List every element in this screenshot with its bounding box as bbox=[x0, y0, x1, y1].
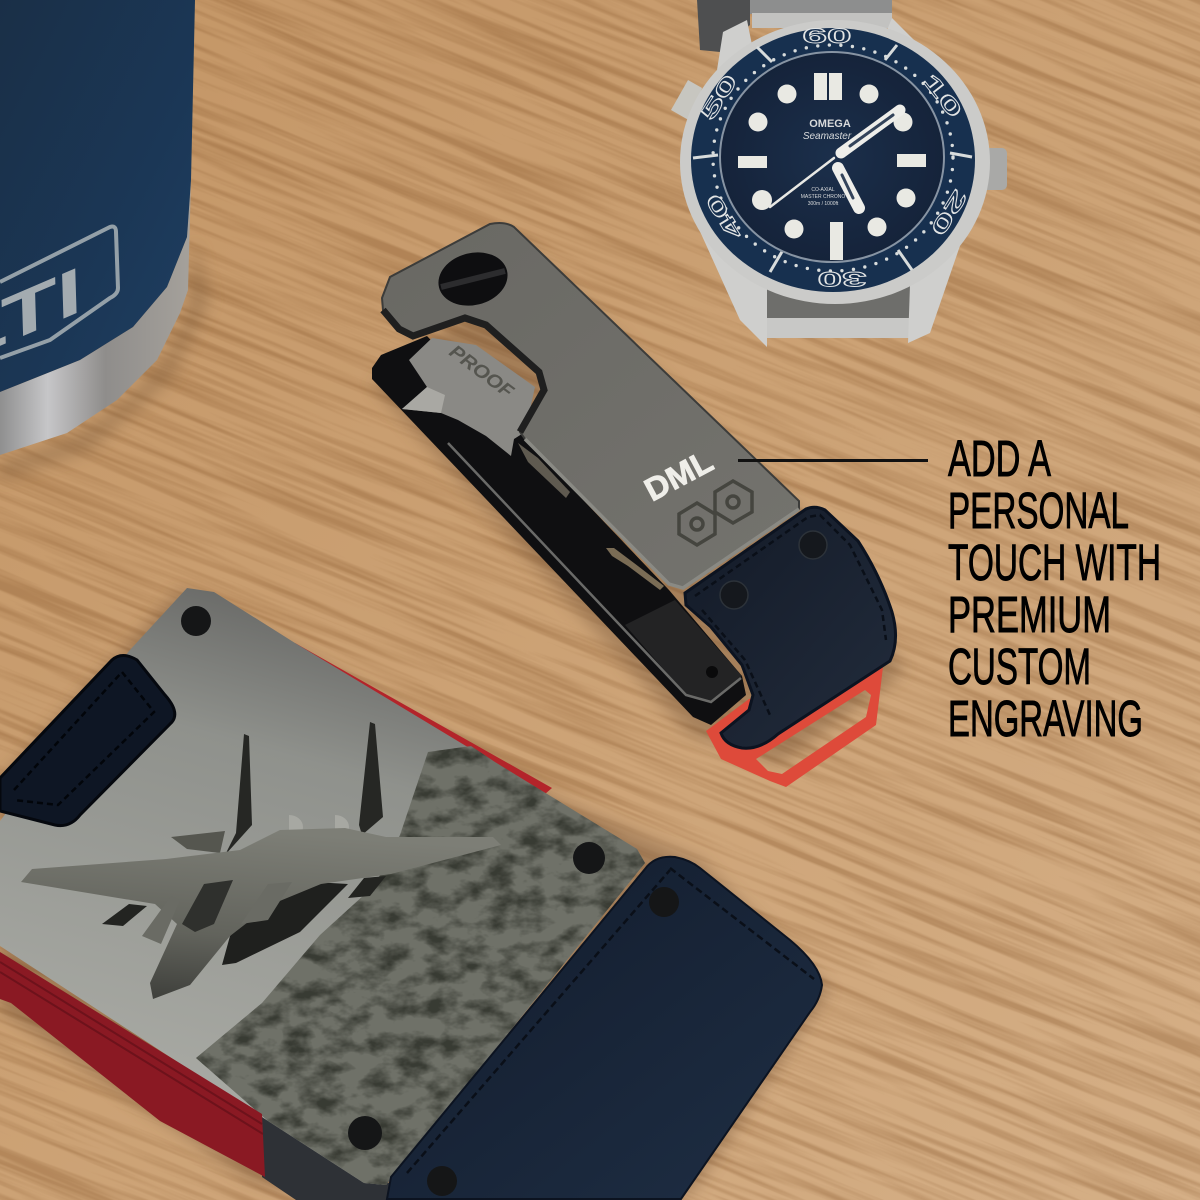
dial markers bbox=[738, 73, 926, 260]
red elastic top bbox=[289, 643, 552, 794]
jet underside bbox=[222, 880, 348, 965]
back plate edge bbox=[448, 443, 741, 702]
tab stitching bbox=[14, 672, 154, 805]
tumbler logo bbox=[0, 227, 118, 380]
key bbox=[402, 338, 664, 590]
watch brand text: OMEGA bbox=[809, 118, 851, 130]
wallet plate bbox=[0, 588, 645, 1185]
bezel dots bbox=[713, 45, 953, 271]
screw bbox=[433, 245, 513, 313]
watch brand text: Seamaster bbox=[803, 131, 852, 142]
watch brand text: CO-AXIAL bbox=[811, 187, 835, 193]
bezel numerals bbox=[697, 25, 971, 290]
top plate lower edge bbox=[525, 439, 799, 588]
watch lugs bbox=[698, 18, 963, 347]
callout line bbox=[738, 459, 928, 462]
jet intakes bbox=[142, 882, 292, 944]
leather flap bbox=[387, 857, 822, 1199]
callout text: ADD A bbox=[948, 430, 1051, 487]
wallet bbox=[0, 588, 830, 1200]
strap stitching bbox=[695, 515, 886, 640]
wallet screws bbox=[181, 606, 679, 1196]
organizer shadow bbox=[372, 240, 905, 765]
watch right crown bbox=[980, 148, 1007, 190]
callout text: PREMIUM bbox=[948, 586, 1111, 643]
strap stitching lower bbox=[702, 610, 770, 715]
bezel ticks bbox=[693, 45, 972, 272]
red loop bbox=[706, 667, 883, 787]
bezel numerals: 50 bbox=[697, 71, 742, 124]
key organizer bbox=[372, 223, 905, 787]
callout text: CUSTOM bbox=[948, 638, 1091, 695]
bezel numerals: 20 bbox=[926, 186, 971, 239]
jet left missile bbox=[102, 904, 147, 926]
watch case bbox=[680, 20, 990, 304]
key: PROOF bbox=[445, 341, 518, 403]
watch bbox=[671, 0, 1007, 347]
watch brand text bbox=[801, 118, 852, 207]
jet stabilizer bbox=[171, 831, 225, 853]
top plate bbox=[382, 223, 799, 588]
engraved jet bbox=[21, 722, 501, 999]
tumbler bbox=[0, 0, 210, 480]
bezel numerals: 30 bbox=[817, 267, 867, 290]
callout text bbox=[948, 430, 1161, 747]
watch dial bbox=[720, 52, 944, 262]
jet cockpit bbox=[182, 880, 233, 932]
watch bezel bbox=[691, 28, 975, 292]
bezel numerals: 10 bbox=[918, 69, 966, 122]
jet engines bbox=[289, 815, 349, 839]
bezel numerals: 40 bbox=[702, 190, 747, 243]
strap rivets bbox=[720, 531, 827, 609]
back plate screw bbox=[706, 666, 718, 678]
watch brand text: MASTER CHRONO bbox=[801, 194, 845, 200]
engraving DML: DML bbox=[638, 443, 719, 508]
back plate end bbox=[625, 600, 742, 702]
leather tab bbox=[0, 656, 175, 826]
watch left crown bbox=[671, 80, 702, 122]
watch strap bbox=[697, 0, 913, 338]
red elastic band bbox=[0, 952, 265, 1177]
engraved logo bbox=[679, 481, 752, 545]
jet right missile bbox=[348, 876, 386, 898]
top plate bevels bbox=[383, 310, 544, 432]
jet tails bbox=[225, 722, 383, 855]
engraved mountains bbox=[196, 746, 645, 1185]
bezel numerals: 60 bbox=[802, 25, 852, 48]
wallet shadow bbox=[0, 590, 830, 1195]
watch brand text: 300m / 1000ft bbox=[808, 201, 839, 207]
jet body and wings bbox=[21, 828, 501, 999]
flap stitching bbox=[407, 868, 814, 1173]
wallet cards bbox=[262, 1105, 400, 1200]
leather strap bbox=[685, 507, 896, 748]
back plate bbox=[372, 336, 746, 725]
watch hands bbox=[770, 110, 900, 208]
